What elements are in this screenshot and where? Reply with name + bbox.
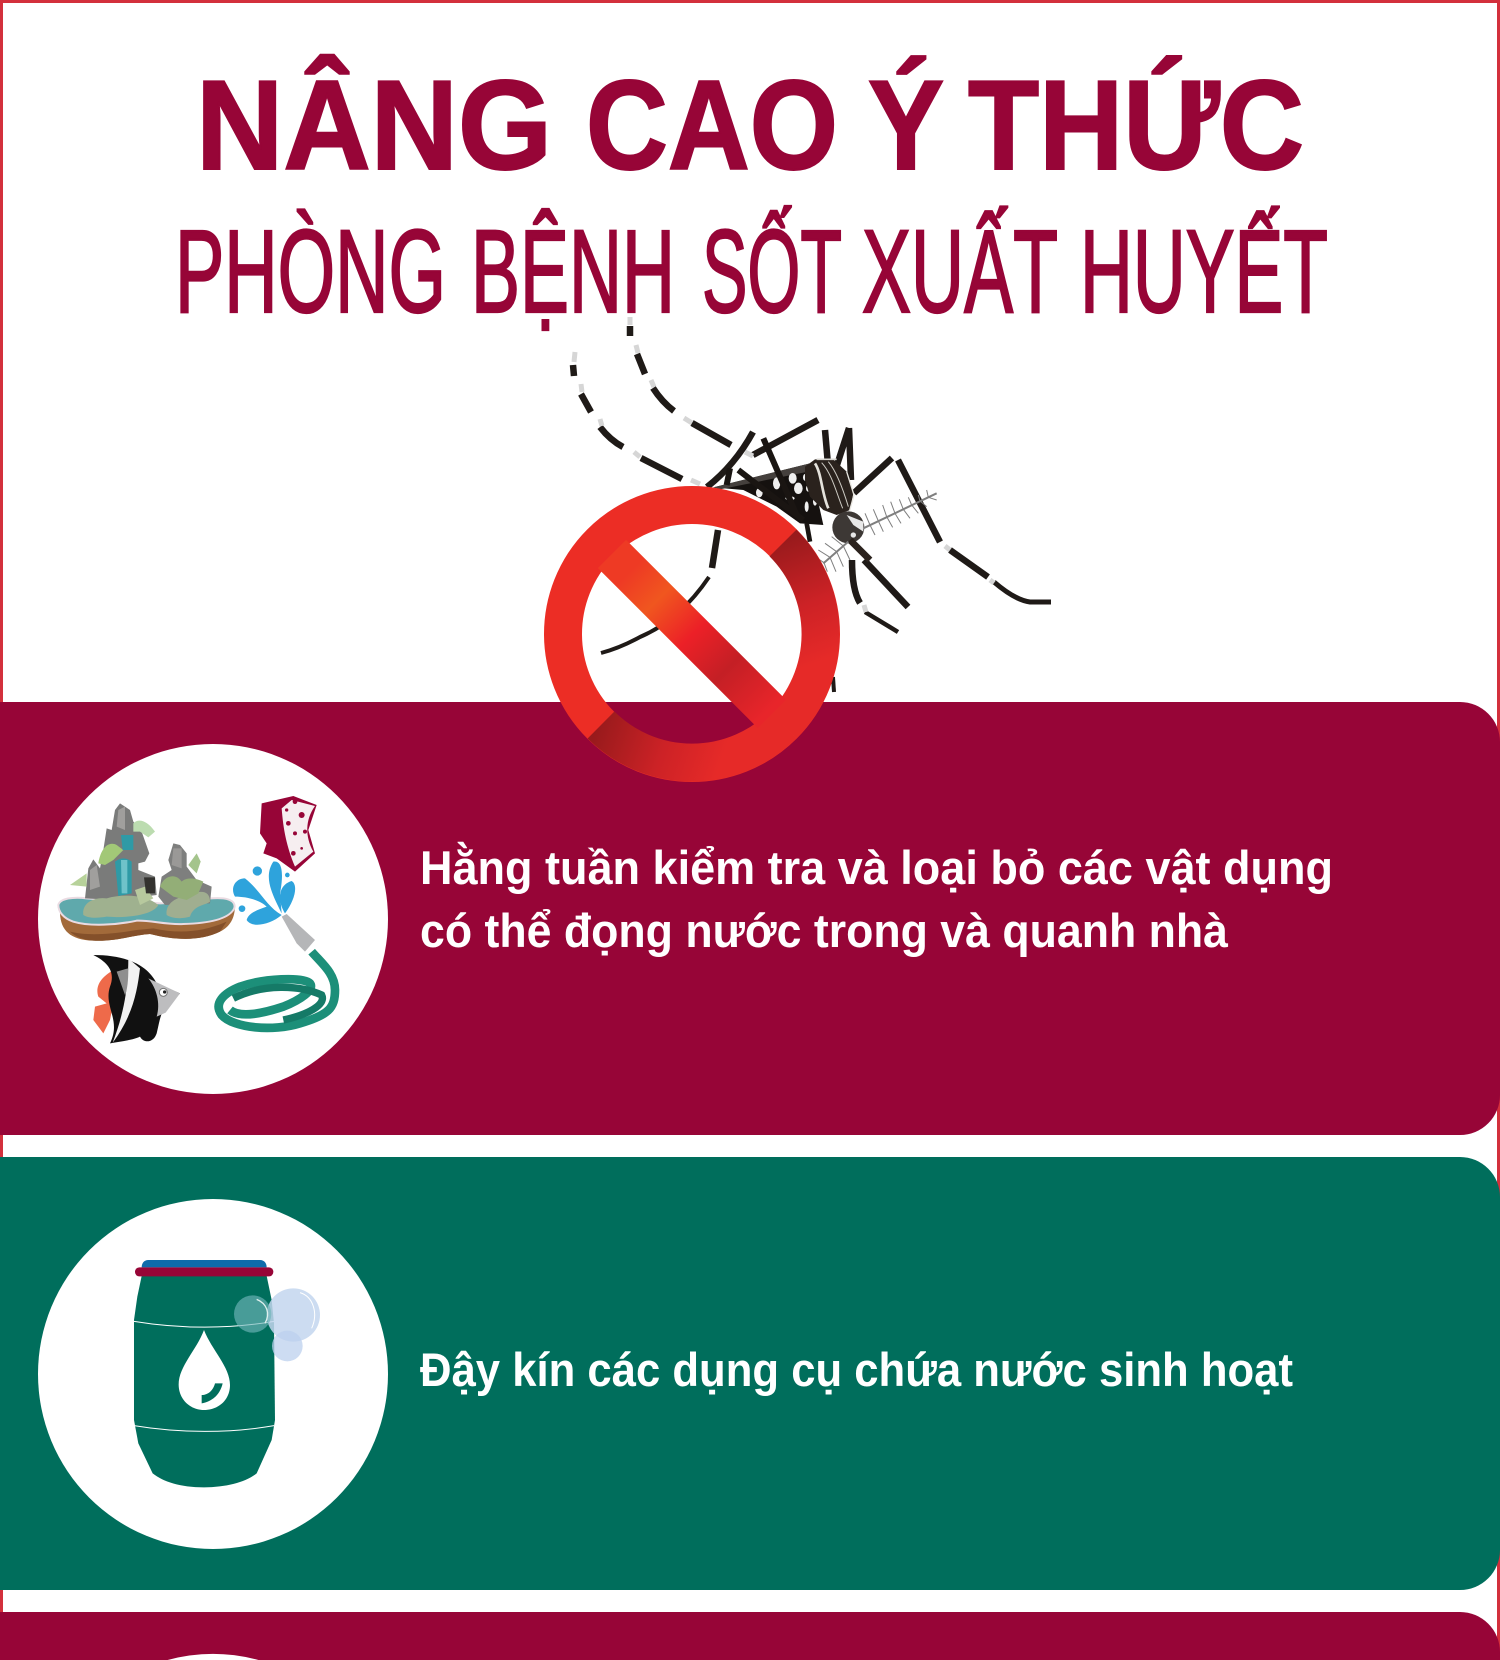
ring bbox=[563, 505, 821, 763]
title: Ý bbox=[868, 54, 944, 196]
subtitle: XUẤT bbox=[862, 205, 1058, 338]
subtitle: BỆNH bbox=[471, 206, 675, 338]
subtitle bbox=[175, 205, 1328, 338]
text: cover containers: Đậy kín các dụng cụ chứa nước sinh hoạt bbox=[420, 1343, 1293, 1396]
subtitle: SỐT bbox=[702, 205, 842, 338]
title: CAO bbox=[586, 54, 838, 196]
thorax bbox=[805, 459, 853, 515]
no-entry sign bbox=[563, 505, 821, 763]
ring shaded lower left bbox=[601, 725, 783, 763]
icon: garden hose with water splash bbox=[219, 862, 335, 1028]
title bbox=[196, 54, 1304, 196]
antenna upper bbox=[863, 490, 937, 535]
title: THỨC bbox=[968, 54, 1304, 196]
diagonal bar bbox=[612, 554, 772, 714]
bubbles bbox=[234, 1288, 320, 1361]
icon: sponge bbox=[260, 796, 317, 872]
near legs bbox=[727, 438, 803, 520]
title: NÂNG bbox=[196, 54, 552, 196]
leg white bands bbox=[574, 317, 994, 612]
icon circle: barrel background bbox=[38, 1199, 388, 1549]
panel: third panel cut off at page bottom bbox=[0, 1612, 1500, 1660]
icon: water barrel bbox=[134, 1260, 320, 1487]
panel: cover water containers bbox=[0, 1157, 1500, 1590]
text: around the house: có thể đọng nước trong và quanh nhà bbox=[420, 904, 1229, 957]
subtitle: PHÒNG bbox=[175, 206, 446, 338]
icon circle: household items bbox=[38, 744, 388, 1094]
mosquito bbox=[573, 317, 1051, 692]
icon circle: third panel bbox=[168, 1654, 258, 1660]
icon: water drop bbox=[179, 1330, 230, 1410]
abdomen spots bbox=[756, 473, 817, 512]
proboscis bbox=[850, 540, 870, 560]
panel: check and remove standing water bbox=[0, 702, 1500, 1135]
ring shaded upper right bbox=[783, 543, 821, 725]
head bbox=[832, 511, 864, 543]
mosquito legs bbox=[573, 326, 1051, 692]
mosquito body bbox=[713, 438, 937, 572]
abdomen bbox=[713, 463, 823, 525]
text: check weekly: Hằng tuần kiểm tra và loại bỏ các vật dụng bbox=[420, 841, 1333, 894]
antenna lower bbox=[815, 537, 850, 572]
icon: fish bbox=[93, 955, 180, 1043]
icon: rock garden bbox=[58, 803, 235, 941]
subtitle: HUYẾT bbox=[1080, 205, 1328, 338]
